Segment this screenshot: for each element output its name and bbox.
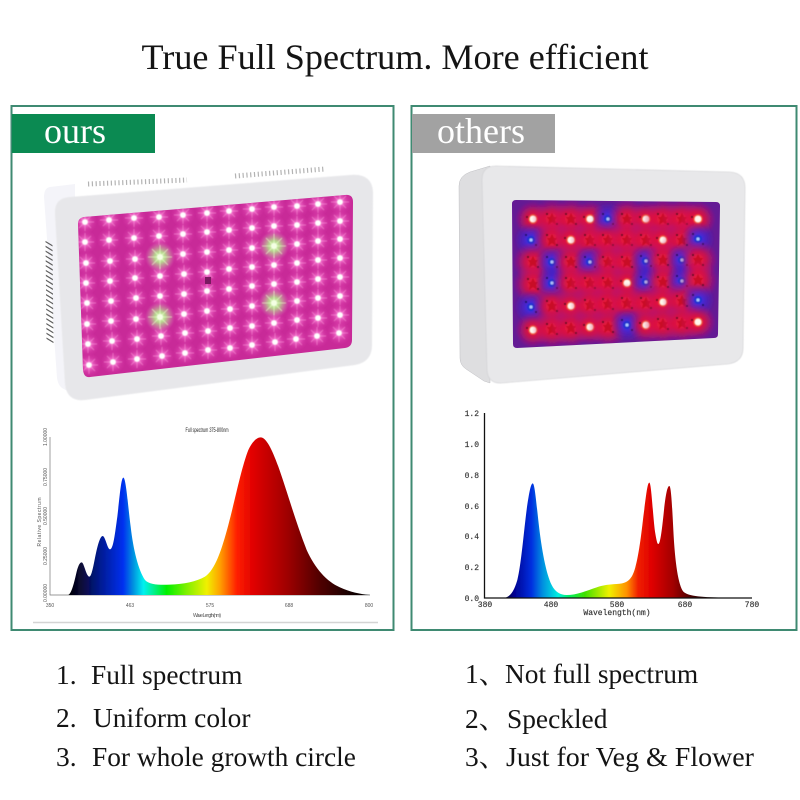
spectrum chart: ours: 575 [206,603,214,609]
list: ours features: For whole growth circle [92,742,356,772]
spectrum chart: ours [33,428,378,622]
lamp side face [459,166,490,383]
spectrum chart: others: 0.4 [465,533,479,542]
spectrum chart: ours: 800 [365,603,373,609]
list: others features [465,659,754,772]
spectrum chart: others: 380 [478,601,492,610]
spectrum chart: others: 0.8 [465,472,479,481]
spectrum chart: others: 680 [678,601,692,610]
lamp front frame [55,175,373,400]
spectrum chart: ours: Full spectrum 375-800nm [186,428,229,434]
product photo: others LED panel [459,166,745,383]
spectrum chart: others: 0.6 [465,503,479,512]
list: ours features: 2. [56,703,77,733]
panel: ours [12,106,394,630]
spectrum curve [68,437,370,595]
spectrum chart: ours: 0.75000 [43,468,49,486]
list: others features: 2、 [465,704,506,734]
top vents [88,169,325,184]
list: others features: 3、 [465,742,506,772]
spectrum chart: others: 1.0 [465,441,479,450]
spectrum chart: ours: 0.50000 [43,507,49,525]
spectrum chart: ours: 463 [126,603,134,609]
spectrum chart: others: 0.2 [465,564,479,573]
list: others features: Just for Veg & Flower [506,742,754,772]
pink LED grid [73,190,352,377]
spectrum chart: others: 0.0 [465,595,479,604]
lamp side face [44,184,75,395]
spectrum chart: others: 780 [745,601,759,610]
product photo: ours LED panel [44,169,373,400]
list: others features: Speckled [507,704,608,734]
label: others: others [437,111,525,151]
lamp front frame [482,166,745,383]
spectrum chart: ours: 1.00000 [43,428,49,446]
list: ours features [56,660,356,772]
spectrum chart: others: 1.2 [465,410,479,419]
spectrum chart: others [465,410,759,618]
panel: others [412,106,796,630]
label: others [412,111,555,153]
label: ours [12,111,155,153]
title: True Full Spectrum. More efficient [142,37,648,77]
side vents [49,243,50,342]
spectrum chart: ours: Relative Spectrum [37,498,43,546]
spectrum chart: ours: 350 [46,603,54,609]
list: ours features: 3. [56,742,77,772]
list: ours features: Full spectrum [91,660,242,690]
brand mark [205,277,211,284]
spectrum chart: ours: 0.00000 [43,584,49,602]
list: others features: 1、 [465,659,506,689]
spectrum chart: ours: Wave Length (nm) [193,613,221,619]
spectrum chart: ours: 688 [285,603,293,609]
LED window [512,200,720,348]
spectrum chart: ours: 0.25000 [43,547,49,565]
list: ours features: Uniform color [93,703,250,733]
list: ours features: 1. [56,660,77,690]
green LEDs [145,231,289,332]
spectrum curve [505,483,727,598]
list: others features: Not full spectrum [505,659,698,689]
spectrum chart: others: 580 [610,601,624,610]
label: ours: ours [44,111,106,151]
spectrum chart: others: 480 [544,601,558,610]
LED window [78,194,353,378]
LED grid [513,199,718,349]
spectrum chart: others: Wavelength(nm) [583,609,651,618]
